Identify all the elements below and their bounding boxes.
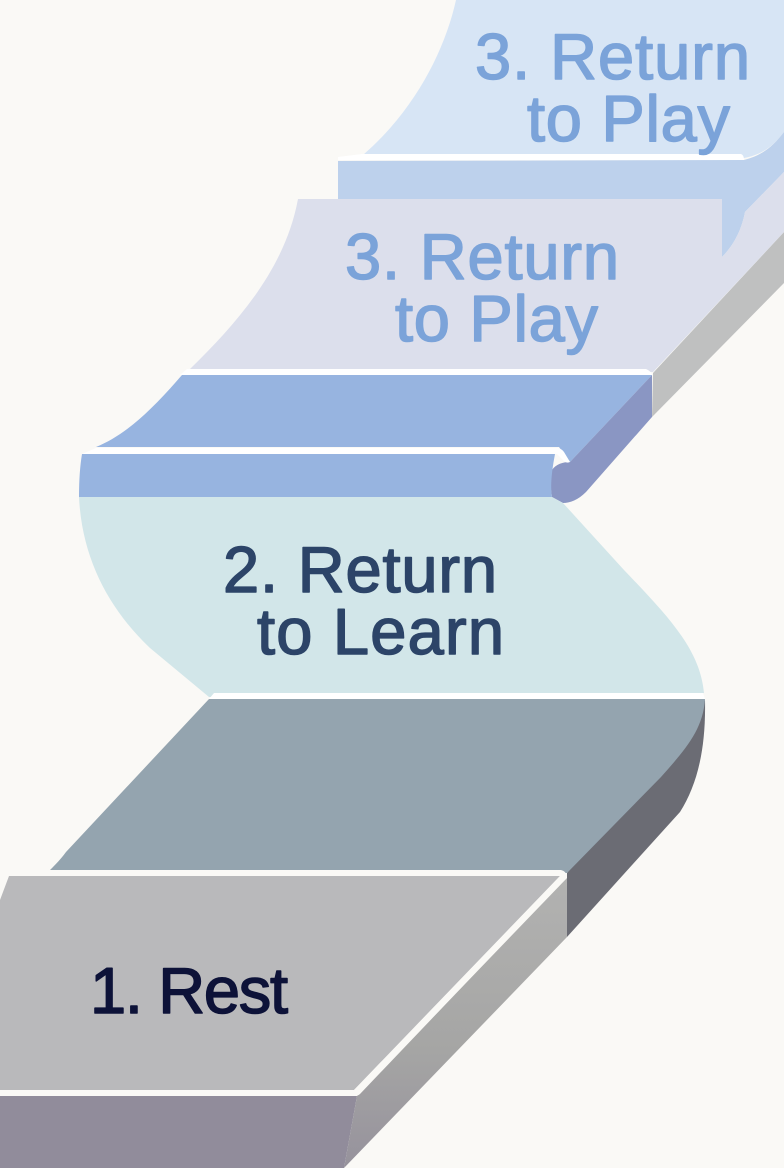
teal panel heading: to Learn [257, 595, 504, 668]
teal panel heading: 2. Return [223, 533, 497, 606]
rest heading: 1. Rest [90, 954, 288, 1027]
step 1: rest [0, 870, 567, 1168]
slate surface [50, 699, 705, 873]
slate dark side [567, 700, 705, 937]
step 3 upper: return to play (top panel) [338, 0, 784, 257]
teal surface [79, 497, 704, 697]
top panel heading [475, 20, 750, 155]
lower blue strip [79, 454, 555, 497]
lavender panel heading [345, 220, 619, 355]
lavender side wall [652, 232, 784, 417]
white edges of blue riser [82, 369, 652, 463]
rest right side wall [344, 878, 567, 1168]
top panel heading: to Play [527, 82, 730, 155]
rest front wall [0, 1096, 357, 1168]
rest white edge [0, 870, 566, 1096]
step 3 lower: return to play (lavender panel) [190, 172, 784, 417]
rest surface [0, 876, 560, 1090]
lavender panel heading: 3. Return [345, 220, 619, 293]
teal white edge [209, 693, 705, 699]
top panel side fold [338, 132, 784, 257]
top panel white edge [338, 154, 744, 160]
blue curl side [550, 375, 652, 503]
slate riser [50, 699, 705, 937]
top panel heading: 3. Return [475, 20, 750, 93]
top panel surface [363, 0, 784, 158]
blue riser with curl [79, 369, 652, 503]
upper blue surface [96, 375, 652, 462]
teal panel heading [223, 533, 504, 668]
lavender surface [190, 172, 784, 372]
lavender panel heading: to Play [395, 282, 598, 355]
step 2: return to learn [79, 497, 705, 699]
